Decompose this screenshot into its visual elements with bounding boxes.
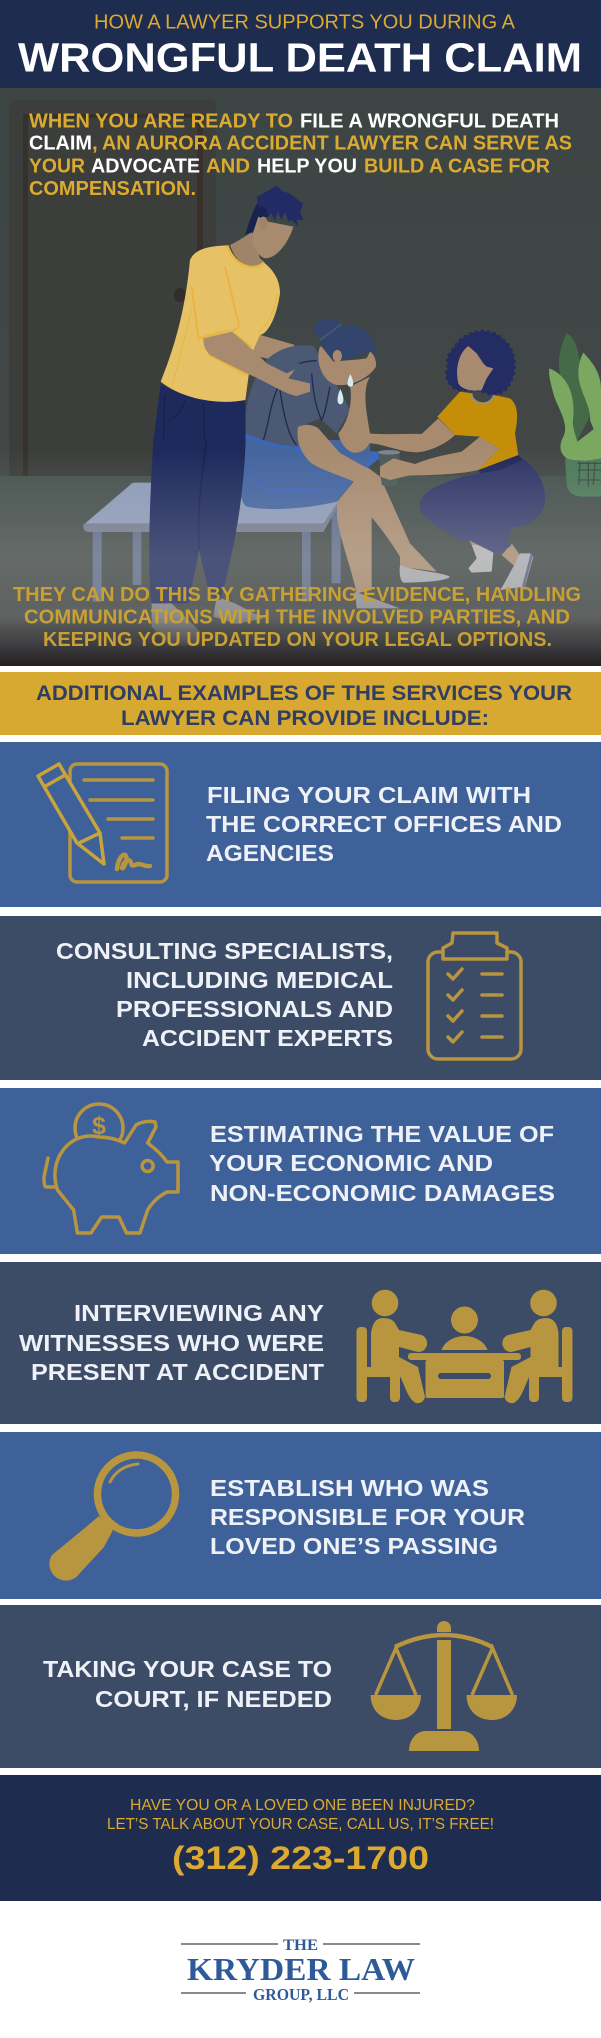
establishing text	[210, 1475, 525, 1559]
closing paragraph over illustration	[13, 583, 581, 651]
interviewing text	[19, 1300, 324, 1385]
intro paragraph: AND	[206, 155, 250, 178]
panel: estimating damages	[0, 1088, 601, 1254]
filing text: THE CORRECT OFFICES AND	[206, 811, 562, 837]
consulting text: PROFESSIONALS AND	[116, 996, 393, 1022]
phone number: (312) 223-1700	[172, 1840, 429, 1876]
intro paragraph: ,	[92, 132, 98, 155]
estimating text	[209, 1121, 555, 1206]
filing text: FILING YOUR CLAIM WITH	[207, 782, 531, 808]
closing paragraph over illustration: COMMUNICATIONS WITH THE INVOLVED PARTIES, AND	[24, 606, 570, 629]
intro paragraph: COMPENSATION.	[29, 177, 196, 200]
intro paragraph: HELP YOU	[257, 155, 357, 178]
intro paragraph: BUILD A CASE FOR	[364, 155, 550, 178]
bottom fade overlay	[0, 450, 601, 666]
icon: people meeting at a table	[356, 1290, 572, 1403]
establishing text: RESPONSIBLE FOR YOUR	[210, 1504, 525, 1530]
consulting text: INCLUDING MEDICAL	[126, 967, 393, 993]
panel: establishing responsibility	[0, 1432, 601, 1599]
interviewing text: PRESENT AT ACCIDENT	[31, 1359, 324, 1385]
intro paragraph: CLAIM	[29, 132, 92, 155]
standing man in yellow shirt	[149, 186, 310, 646]
header banner	[0, 0, 601, 88]
panel: filing your claim	[0, 742, 601, 907]
establishing text: LOVED ONE’S PASSING	[210, 1533, 498, 1559]
gold section banner: LAWYER CAN PROVIDE INCLUDE:	[121, 707, 489, 730]
interviewing text: WITNESSES WHO WERE	[19, 1330, 324, 1356]
estimating text: ESTIMATING THE VALUE OF	[210, 1121, 554, 1147]
logo: The Kryder Law Group: GROUP, LLC	[253, 1985, 349, 2004]
header subtitle: HOW A LAWYER SUPPORTS YOU DURING A	[94, 11, 515, 34]
logo: The Kryder Law Group: THE	[283, 1937, 318, 1954]
closing paragraph over illustration: THEY CAN DO THIS BY GATHERING EVIDENCE, HANDLING	[13, 583, 581, 606]
logo: The Kryder Law Group	[181, 1937, 420, 2004]
header title: WRONGFUL DEATH CLAIM	[18, 34, 582, 80]
icon: clipboard checklist	[428, 933, 521, 1059]
bench	[83, 483, 341, 602]
intro paragraph: YOUR	[29, 155, 85, 178]
icon: piggy bank with coin: $	[92, 1112, 106, 1140]
court text	[43, 1656, 332, 1712]
panel: call to action: HAVE YOU OR A LOVED ONE BEEN INJURED?	[130, 1797, 475, 1814]
seated grieving woman	[240, 318, 450, 608]
filing text: AGENCIES	[206, 840, 334, 866]
closing paragraph over illustration: KEEPING YOU UPDATED ON YOUR LEGAL OPTIONS.	[43, 628, 552, 651]
panel: taking your case to court	[0, 1605, 601, 1768]
filing text	[206, 782, 562, 866]
intro paragraph: FILE A WRONGFUL DEATH	[300, 110, 559, 132]
gold section banner: ADDITIONAL EXAMPLES OF THE SERVICES YOUR	[36, 682, 572, 705]
intro paragraph: WHEN YOU ARE READY TO	[29, 110, 293, 132]
crouching woman with cup	[368, 331, 545, 590]
logo: The Kryder Law Group: KRYDER LAW	[187, 1951, 415, 1987]
consulting text: ACCIDENT EXPERTS	[142, 1025, 393, 1051]
consulting text: CONSULTING SPECIALISTS,	[56, 938, 393, 964]
estimating text: NON-ECONOMIC DAMAGES	[210, 1180, 555, 1206]
gold section banner	[0, 672, 601, 735]
estimating text: YOUR ECONOMIC AND	[209, 1150, 493, 1176]
court text: TAKING YOUR CASE TO	[43, 1656, 332, 1682]
panel: illustration of family comforting a grieving woman	[0, 88, 601, 666]
panel: call to action: LET’S TALK ABOUT YOUR CASE, CALL US, IT’S FREE!	[107, 1816, 494, 1833]
panel: call to action	[0, 1775, 601, 1901]
icon: magnifying glass	[49, 1455, 176, 1581]
intro paragraph: AN AURORA ACCIDENT LAWYER CAN SERVE AS	[102, 132, 572, 155]
consulting text	[56, 938, 393, 1051]
icon: piggy bank with coin	[44, 1104, 178, 1233]
icon: scales of justice	[371, 1621, 517, 1751]
icon: document and pencil	[38, 764, 167, 882]
court text: COURT, IF NEEDED	[95, 1686, 332, 1712]
door	[9, 100, 216, 476]
intro paragraph: ADVOCATE	[91, 155, 200, 178]
panel: interviewing witnesses	[0, 1262, 601, 1424]
establishing text: ESTABLISH WHO WAS	[210, 1475, 489, 1501]
interviewing text: INTERVIEWING ANY	[74, 1300, 324, 1326]
intro paragraph	[29, 110, 572, 200]
plant	[549, 333, 601, 497]
panel: consulting specialists	[0, 916, 601, 1080]
